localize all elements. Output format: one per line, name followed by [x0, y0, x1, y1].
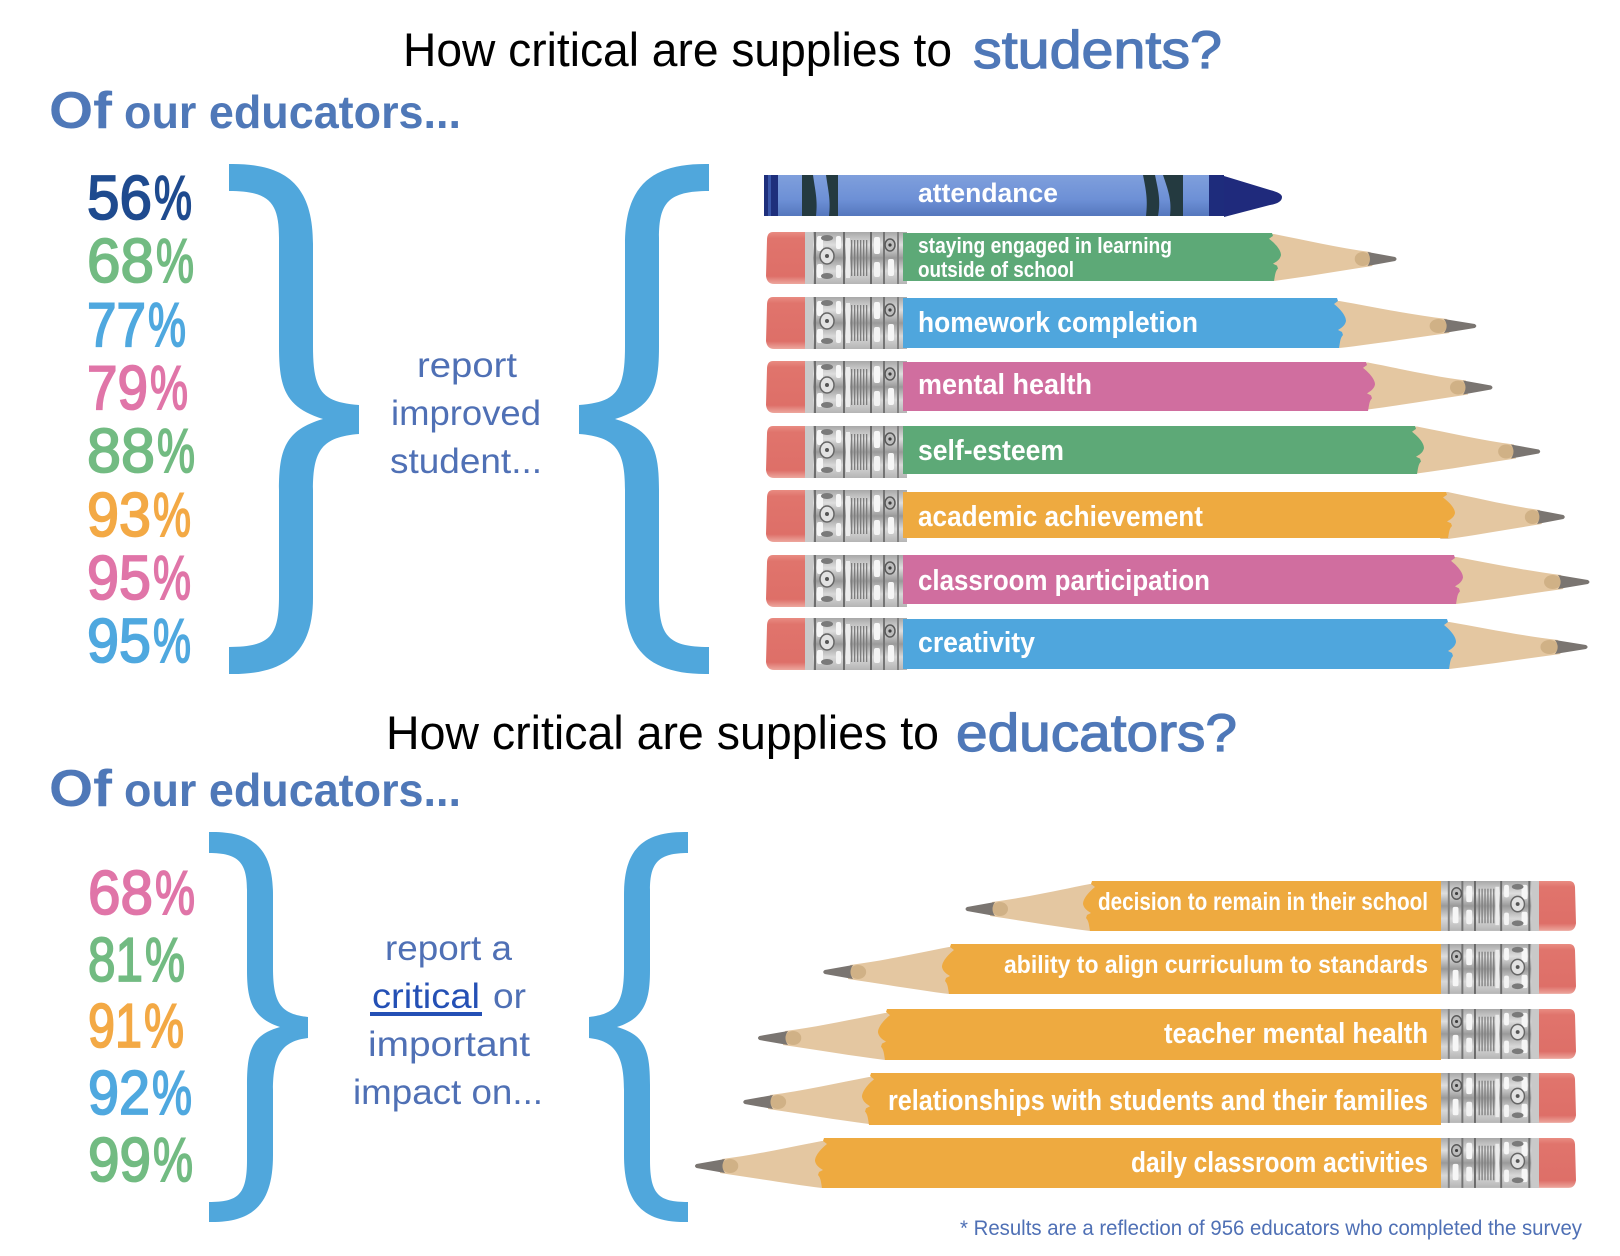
- 79 percent: [87, 354, 188, 423]
- line: student: student...: [390, 442, 542, 481]
- 95 percent: [87, 544, 191, 613]
- heading: of our educators, bottom: [49, 760, 461, 818]
- label: staying engaged line 2: outside of school: [918, 257, 1074, 282]
- 79 percent: %: [150, 354, 188, 423]
- pencil: academic achievement: [766, 490, 1565, 542]
- 77 percent: %: [148, 291, 186, 360]
- 79 percent: 79: [87, 354, 148, 423]
- label: classroom participation: classroom participation: [918, 565, 1210, 597]
- underline: critical: [370, 1012, 482, 1016]
- highlighted word: students: students?: [973, 21, 1222, 80]
- heading words: our educators: our educators...: [124, 86, 461, 138]
- pencil: homework completion: [766, 297, 1476, 349]
- 92 percent: 92: [88, 1059, 150, 1128]
- 68 percent: 68: [87, 227, 154, 296]
- percentages: educator outcomes: [88, 859, 195, 1195]
- 77 percent: [87, 291, 186, 360]
- 95 percent: 95: [87, 607, 151, 676]
- line: report a: report a: [385, 929, 513, 968]
- line: report: report: [417, 346, 517, 385]
- 91 percent: %: [144, 992, 184, 1061]
- opening brace, bottom: [589, 832, 688, 1222]
- 77 percent: 77: [87, 291, 146, 360]
- 88 percent: [87, 417, 195, 486]
- 68 percent: %: [156, 227, 194, 296]
- 68 percent: [87, 227, 194, 296]
- 81 percent: 81: [88, 926, 143, 995]
- label: attendance: attendance: [918, 178, 1058, 208]
- 92 percent: %: [152, 1059, 192, 1128]
- label: daily classroom activities: daily classroom activities: [1131, 1147, 1428, 1179]
- title: supplies to educators: [386, 704, 1237, 763]
- line: important: important: [368, 1025, 530, 1064]
- closing brace, top: [229, 164, 359, 674]
- crayon: attendance: [764, 175, 1282, 217]
- 56 percent: 56: [87, 164, 152, 233]
- pencil: staying engaged: [766, 232, 1397, 284]
- 81 percent: %: [145, 926, 185, 995]
- 99 percent: [88, 1126, 193, 1195]
- closing brace, bottom: [209, 832, 308, 1222]
- pencil: self-esteem: [766, 426, 1540, 478]
- heading words: our educators: our educators...: [124, 764, 461, 816]
- 68 percent: [88, 859, 195, 928]
- label: relationships: relationships with students and their families: [888, 1085, 1428, 1117]
- heading: of our educators, top: [49, 82, 461, 140]
- 88 percent: %: [157, 417, 195, 486]
- label: ability to align: ability to align curriculum to standards: [1004, 951, 1428, 979]
- opening brace, top: [579, 164, 709, 674]
- label: self-esteem: self-esteem: [918, 435, 1064, 467]
- 95 percent: 95: [87, 544, 151, 613]
- label: academic achievement: academic achievement: [918, 501, 1203, 533]
- 56 percent: %: [154, 164, 192, 233]
- 92 percent: [88, 1059, 192, 1128]
- word: critical: critical: [372, 977, 480, 1016]
- heading word: Of: Of: [49, 760, 113, 818]
- pencil: creativity: [766, 618, 1588, 670]
- pencil: classroom participation: [766, 555, 1589, 607]
- 93 percent: %: [153, 481, 191, 550]
- 99 percent: %: [153, 1126, 193, 1195]
- pencil: decision to remain: [966, 881, 1576, 931]
- 99 percent: 99: [88, 1126, 151, 1195]
- pencil: ability to align: [823, 944, 1576, 994]
- 95 percent: %: [153, 607, 191, 676]
- 95 percent: %: [153, 544, 191, 613]
- pencil: teacher mental health: [758, 1009, 1576, 1060]
- line: improved: improved: [391, 394, 541, 433]
- label: creativity: creativity: [918, 627, 1035, 659]
- pencil: daily classroom activities: [695, 1138, 1576, 1188]
- label: homework completion: homework completion: [918, 307, 1198, 339]
- 95 percent: [87, 607, 191, 676]
- line: impact on: impact on...: [353, 1073, 543, 1112]
- 93 percent: [87, 481, 191, 550]
- highlighted word: educators: educators?: [956, 704, 1237, 763]
- word: or: or: [493, 977, 526, 1016]
- title: supplies to students: [403, 21, 1222, 80]
- label: mental health: mental health: [918, 369, 1092, 401]
- 68 percent: %: [155, 859, 195, 928]
- text: report a critical or important impact on: [353, 929, 543, 1112]
- text: report improved student: [390, 346, 542, 481]
- 68 percent: 68: [88, 859, 153, 928]
- title text: How critical are supplies to: [403, 23, 952, 76]
- heading word: Of: Of: [49, 82, 113, 140]
- label: staying engaged line 1: staying engaged in learning: [918, 233, 1172, 258]
- label: decision to remain: decision to remain in their school: [1098, 888, 1428, 916]
- 91 percent: 91: [88, 992, 142, 1061]
- percentages: student outcomes: [87, 164, 195, 676]
- label: teacher mental health: teacher mental health: [1164, 1018, 1428, 1050]
- pencil: relationships: [743, 1073, 1576, 1125]
- pencil: mental health: [766, 361, 1492, 413]
- footnote: * Results are a reflection of 956 educators who completed the survey: [960, 1217, 1582, 1240]
- 56 percent: [87, 164, 192, 233]
- 93 percent: 93: [87, 481, 151, 550]
- 88 percent: 88: [87, 417, 155, 486]
- title text: How critical are supplies to: [386, 706, 939, 759]
